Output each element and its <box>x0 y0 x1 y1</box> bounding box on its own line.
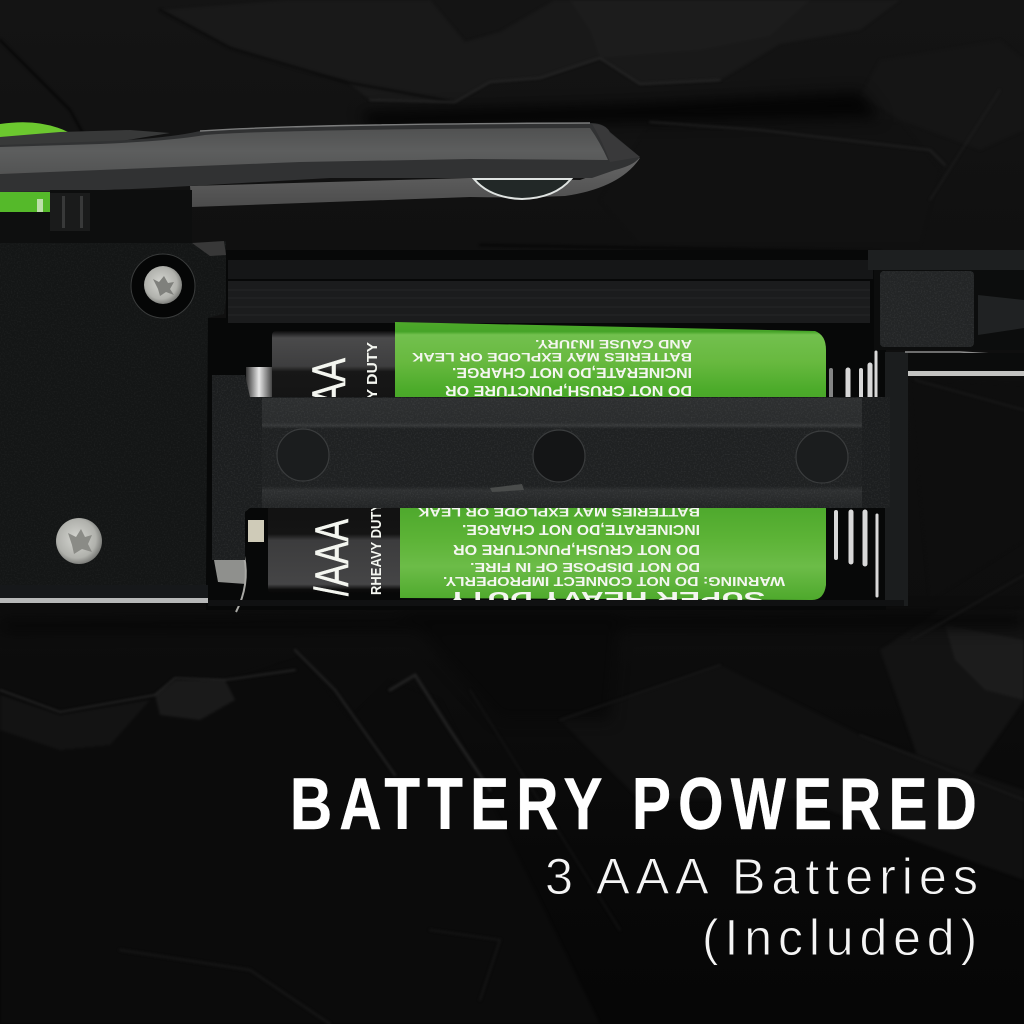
battery: bottom AAA: /AAA <box>305 519 358 596</box>
subheading: 3 AAA Batteries <box>545 848 984 905</box>
rock shadows <box>0 92 1024 720</box>
lever light upper face <box>0 128 608 174</box>
battery holder frame with centre bar <box>208 352 908 606</box>
lever dark lower band <box>0 123 640 192</box>
battery: bottom AAA: DO NOT CRUSH,PUNCTURE OR <box>453 541 700 558</box>
right end clip and metal rail <box>868 250 1024 376</box>
battery: bottom AAA: DO NOT DISPOSE OF IN FIRE. <box>470 560 700 575</box>
battery: top AAA: AAA <box>302 358 355 430</box>
stapler lever handle <box>0 122 640 207</box>
battery: top AAA: INCINERATE,DO NOT CHARGE. <box>452 364 692 381</box>
subheading <box>545 848 984 966</box>
subheading: (Included) <box>702 909 983 966</box>
battery springs <box>831 352 877 596</box>
battery: top AAA: HEAVY DUTY <box>364 342 381 442</box>
base rail <box>0 585 208 598</box>
rear grip cap <box>0 130 170 147</box>
battery: bottom AAA <box>214 503 826 612</box>
lever tip facet <box>592 124 640 162</box>
lever underside wedge <box>190 158 640 207</box>
battery: top AAA: DO NOT CRUSH,PUNCTURE OR <box>445 382 692 399</box>
battery: bottom AAA: INCINERATE,DO NOT CHARGE. <box>462 521 700 538</box>
battery: bottom AAA: WARNING: DO NOT CONNECT IMPROPERLY. <box>443 574 785 589</box>
battery: bottom AAA: SUPER HEAVY DUTY <box>446 587 765 609</box>
screw bottom <box>56 518 102 564</box>
bar ejector marks <box>277 429 848 483</box>
green button top <box>0 122 68 140</box>
stapler body plate <box>0 241 226 603</box>
screw top <box>131 254 195 318</box>
battery: bottom AAA: BATTERIES MAY EXPLODE OR LEAK <box>418 505 700 519</box>
battery compartment upper rails <box>206 250 886 610</box>
battery: top AAA: AND CAUSE INJURY. <box>535 337 692 351</box>
lever support post and green button stem <box>0 190 192 244</box>
lens ring <box>474 179 571 199</box>
battery: top AAA <box>246 322 826 397</box>
battery: top AAA: BATTERIES MAY EXPLODE OR LEAK <box>412 350 692 364</box>
battery: bottom AAA: RHEAVY DUTY <box>368 503 385 595</box>
